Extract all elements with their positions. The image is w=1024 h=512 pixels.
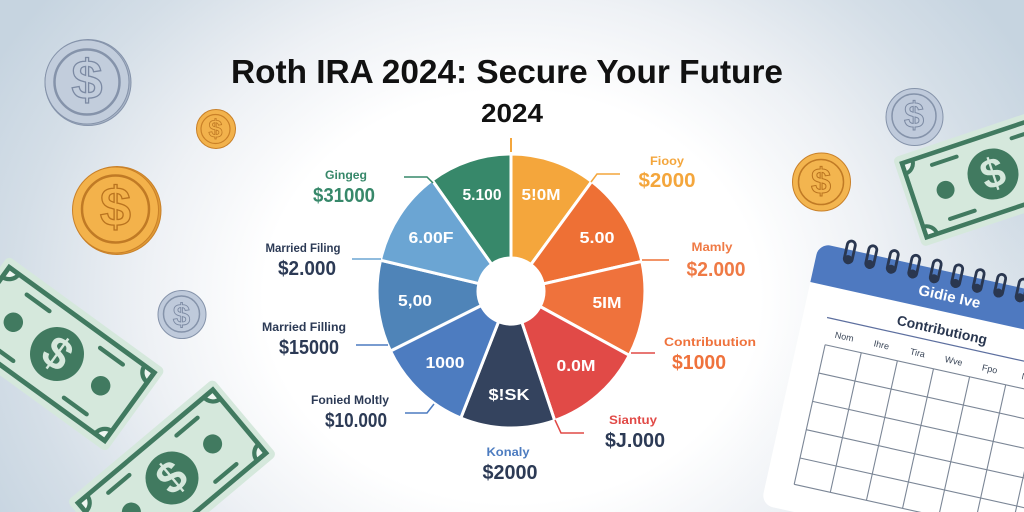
callout: Siantuy: Siantuy	[609, 413, 657, 427]
segment: light blue	[380, 180, 492, 284]
calendar weekday labels: Fpo	[981, 362, 998, 376]
icon: banknote bottom: $	[147, 451, 197, 505]
calendar weekday labels	[834, 330, 1024, 382]
callout: Married Filling: Married Filling	[262, 320, 346, 334]
icon: silver coin top left: $	[71, 48, 103, 111]
callout: Contribuution: Contribuution	[664, 335, 756, 349]
segment values: 1000	[426, 355, 465, 372]
icon: small gold coin: $	[209, 115, 223, 143]
calendar weekday labels: Nom	[834, 330, 855, 344]
calendar header text: Gidie Ive	[917, 282, 982, 312]
calendar weekday labels: Ihre	[873, 338, 890, 351]
callout: Mamly: Mamly	[692, 240, 733, 254]
icon: large gold coin	[72, 166, 161, 254]
callout: Mamly	[642, 240, 746, 281]
icon: banknote bottom	[67, 379, 277, 512]
calendar weekday labels: Tira	[909, 346, 926, 359]
callout: Married Filing top	[266, 241, 381, 280]
callout: Gingeg: $31000	[313, 185, 375, 207]
icon: gold coin right	[792, 153, 850, 211]
callout: Siantuy	[555, 413, 665, 452]
callout: Fonied Moltly: Fonied Moltly	[311, 393, 389, 407]
icon: banknote left	[0, 256, 165, 452]
callout: Married Filling: $15000	[279, 337, 339, 359]
segment: light orange	[540, 261, 645, 355]
top tick mark	[510, 138, 512, 152]
segment: green	[432, 154, 511, 264]
segment values: 0.0M	[556, 358, 596, 375]
segment values: 6.00F	[408, 230, 454, 247]
icon: banknote top right	[893, 101, 1024, 247]
callout: Married Filing top: $2.000	[278, 258, 336, 280]
title: Roth IRA 2024: Secure Your Future	[231, 53, 783, 90]
callout: Contribuution	[631, 335, 756, 374]
icon: gold coin right: $	[811, 160, 831, 202]
icon: banknote top right: $	[974, 147, 1011, 199]
callout: Married Filling	[262, 320, 388, 359]
segment values: 5,00	[398, 293, 432, 310]
segment: navy	[461, 322, 555, 428]
callout: Fiooy: Fiooy	[650, 154, 684, 168]
icon: silver coin top right	[886, 88, 943, 146]
subtitle year: 2024	[481, 98, 544, 128]
callout: Siantuy: $J.000	[605, 430, 665, 452]
segment values	[398, 187, 622, 404]
callout: Konaly	[482, 445, 538, 484]
segment: blue	[390, 306, 499, 418]
segment: red	[522, 306, 629, 421]
callout: Married Filing top: Married Filing	[266, 241, 340, 255]
segment values: 5.00	[580, 230, 615, 247]
icon: silver coin top left	[45, 40, 131, 126]
segment: amber	[511, 154, 592, 265]
calendar grid	[794, 345, 1024, 512]
icon: large gold coin: $	[100, 175, 131, 238]
icon: small silver coin	[158, 290, 206, 338]
icon: silver coin top right: $	[904, 94, 924, 136]
callout: Fonied Moltly	[311, 393, 434, 432]
icon: banknote left: $	[32, 325, 83, 381]
callout: Fiooy	[591, 154, 696, 192]
callout: Konaly: Konaly	[486, 445, 530, 459]
callout: Konaly: $2000	[482, 462, 538, 484]
donut chart	[377, 154, 645, 428]
icon: small gold coin	[196, 110, 236, 148]
segment values: 5IM	[592, 295, 622, 312]
segment values: $!SK	[488, 387, 530, 404]
icon: small silver coin: $	[173, 297, 190, 332]
callout: Gingeg	[313, 168, 433, 207]
callout: Fonied Moltly: $10.000	[325, 410, 387, 432]
segment: orange	[531, 182, 642, 284]
callout: Mamly: $2.000	[686, 259, 746, 281]
calendar subtitle: Contributiong	[896, 312, 989, 347]
segment values: 5!0M	[522, 187, 560, 204]
calendar weekday labels: Wve	[944, 354, 964, 368]
callout: Fiooy: $2000	[638, 170, 696, 192]
calendar spiral rings	[844, 240, 1024, 302]
segment values: 5.100	[462, 187, 502, 204]
callout: Gingeg: Gingeg	[325, 168, 367, 182]
segment: steel blue	[377, 260, 481, 351]
panel: calendar	[761, 234, 1024, 512]
calendar header band	[810, 243, 1024, 351]
callout: Contribuution: $1000	[672, 352, 726, 374]
